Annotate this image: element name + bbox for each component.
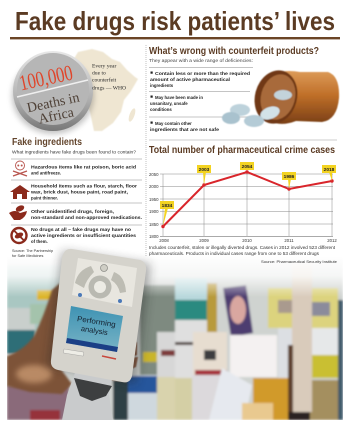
y axis labels: 1850 [149,222,159,227]
background: drug packages [7,258,343,420]
text: other unidentified: Other unidentified drugs, foreign, [31,209,114,214]
white fade at top of photo [0,255,350,297]
text: intro: What ingredients have fake drugs been found to contain? [12,150,137,154]
text: no drugs at all: of them. [31,239,48,244]
x axis labels: 2010 [242,238,252,243]
heading: what's wrong: What’s wrong with counterfeit products? [149,45,319,57]
icon: pill bottle [222,65,339,129]
text: every year caption [92,64,126,92]
data line [163,172,332,226]
x axis labels: 2011 [284,238,294,243]
y axis labels: 2000 [149,184,159,189]
text: household items: wax, brick dust, house paint, road paint, [30,190,128,194]
screen text: performing analysis: Performing [76,314,116,329]
text: Africa: Africa [37,105,76,128]
device [51,249,146,382]
list item 3 [150,121,220,132]
text: source: Source: The Partnership [12,249,53,253]
y axis labels [149,172,159,239]
text: every year caption: drugs — WHO [92,86,126,92]
x axis labels: 2012 [327,238,337,243]
text: no drugs at all: active ingredients or insufficient quantities [31,233,137,238]
x axis labels: 2008 [159,238,169,243]
dotted column divider [145,45,147,256]
list item 1: ingredients [150,83,174,88]
text: every year caption: counterfeit [92,76,117,84]
list item 1: amount of active pharmaceutical [150,77,230,82]
list item 2: unsanitary, unsafe [150,101,188,106]
panel: counterfeit products [149,45,339,132]
device screen [66,306,123,352]
white margins around photo [0,255,7,426]
y axis labels: 1900 [149,209,159,214]
icon: skull [13,161,27,176]
icon: house [10,185,30,199]
text: other unidentified: non-standard and non-approved medications. [31,215,142,220]
icon: map of Africa [66,49,138,131]
text: chart note: pharmaceuticals. Products in individual cases range from one to 53 different drugs [149,251,319,256]
text: 100,000: 100,000 [17,60,75,95]
list item 2: conditions [150,107,172,112]
y axis labels: 1950 [149,197,159,202]
text: household items: Household items such as flour, starch, floor [31,184,137,188]
value labels: 2018 [324,167,335,173]
icon: no drugs [12,228,26,243]
text: every year caption: due to [92,70,106,76]
icon: pill badge [12,51,94,134]
x axis labels [159,238,337,243]
list item 3: May contain other [155,121,192,126]
icon: hand with pills [9,204,27,220]
device stem [62,370,113,420]
heading: fake ingredients: Fake ingredients [12,137,82,148]
text: intro: They appear with a wide range of deficiencies: [149,58,253,63]
list item 2 [150,95,203,112]
device body shadow [48,251,150,384]
panel: crime cases chart [149,140,338,264]
value labels: 1834 [162,203,173,209]
list item 2: May have been made in [155,95,203,100]
list item 3: ingredients that are not safe [150,127,220,132]
text: hazardous items: Hazardous items like rat poison, boric acid [31,164,136,170]
device buttons [75,264,126,303]
text: household items: paint thinner. [31,196,58,200]
text: every year caption: Every year [92,64,117,70]
value labels: 2054 [242,164,253,170]
text: source [12,249,53,258]
value labels: 2003 [199,167,210,173]
panel: fake ingredients [9,137,142,258]
hand [7,283,72,394]
text: chart note [149,245,336,256]
list item 1 [150,71,250,88]
list item 1: Contain less or more than the required [155,71,250,76]
text: hazardous items [31,164,136,176]
y axis labels: 1800 [149,234,159,239]
text: chart note: Includes counterfeit, stolen or illegally diverted drugs. Cases in 2012 involved 523 different [149,245,336,250]
text: chart source: Source: Pharmaceutical Security Institute [261,259,338,264]
text: source: for Safe Medicines [12,254,44,258]
panel: deaths in Africa [12,49,138,134]
text: hazardous items: and antifreeze. [31,170,61,176]
device screen: analysis [80,324,109,337]
line chart [149,162,337,243]
x axis labels: 2009 [199,238,209,243]
y axis labels: 2050 [149,172,159,177]
value labels [160,162,336,226]
value labels: 1986 [284,174,295,180]
text: Deaths in: Deaths in [26,91,81,116]
text: other unidentified [31,209,142,220]
text: no drugs at all [31,227,137,244]
text: no drugs at all: No drugs at all – fake drugs may have no [31,227,131,232]
text: household items [30,184,137,200]
photo: pharmacy shelves with handheld analyser [0,249,350,426]
